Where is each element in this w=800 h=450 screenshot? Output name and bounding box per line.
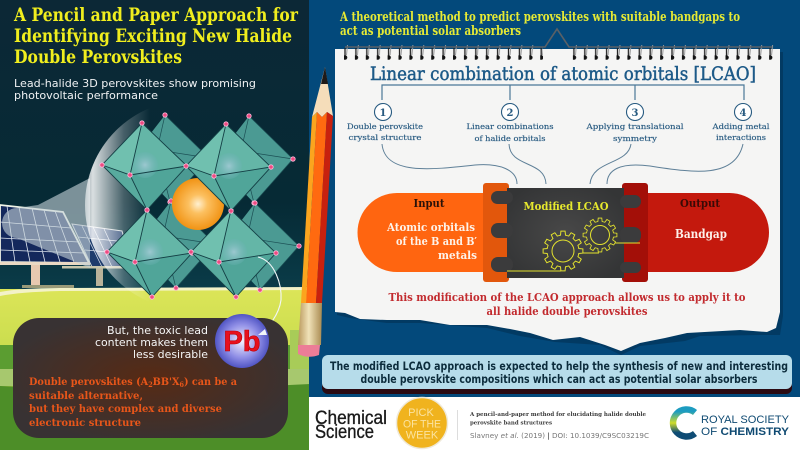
step 1: 1 xyxy=(380,108,386,119)
step 4: Adding metal xyxy=(711,122,770,131)
curved connectors xyxy=(382,144,743,184)
process: input capsule: of the B and B′ xyxy=(396,234,477,248)
step 3: symmetry xyxy=(613,134,658,143)
text: modification note: This modification of the LCAO approach allows us to apply it to xyxy=(388,291,746,304)
panel: right blue background xyxy=(309,0,800,397)
badge: pick of the week: PICK xyxy=(408,407,434,419)
illustration: magnifying dome xyxy=(85,100,295,310)
pencil xyxy=(298,67,333,357)
step 4: 4 xyxy=(740,108,747,119)
top front octahedra xyxy=(100,121,273,213)
badge: pick of the week xyxy=(396,398,448,448)
notepad spiral binding xyxy=(341,29,775,64)
logo: Chemical Science: Science xyxy=(315,422,374,443)
logo: Royal Society of Chemistry: OF CHEMISTRY xyxy=(701,426,790,438)
text: double perovskites alternative: 2 xyxy=(148,380,153,389)
process: input capsule: Atomic orbitals xyxy=(386,220,475,234)
text: double perovskites alternative: suitable alternative, xyxy=(29,390,143,402)
logo: Chemical Science xyxy=(315,408,387,443)
text: double perovskites alternative: 6 xyxy=(179,380,184,389)
text: toxic lead: content makes them xyxy=(95,337,208,349)
process: modified LCAO block xyxy=(483,183,648,282)
illustration: magnified beam xyxy=(2,178,90,268)
subtitle: Lead-halide 3D perovskites show promising xyxy=(14,78,256,90)
text: modification note xyxy=(388,291,746,318)
citation text: Slavney et al. (2019) | DOI: 10.1039/C9SC03219C xyxy=(470,432,649,440)
subtitle: photovoltaic performance xyxy=(14,90,158,102)
process: modified LCAO block: Modified LCAO xyxy=(524,199,608,213)
panel: left background xyxy=(0,0,310,450)
title: Double Perovskites xyxy=(14,47,182,68)
text: double perovskites alternative: Double perovskites (A xyxy=(29,376,158,388)
divider xyxy=(457,410,458,440)
step 1: crystal structure xyxy=(348,133,422,142)
citation text: A pencil-and-paper method for elucidating halide double xyxy=(469,412,646,418)
process: output capsule: Bandgap xyxy=(675,227,727,241)
step 1: Double perovskite xyxy=(347,122,423,131)
citation text xyxy=(469,412,649,440)
subtitle xyxy=(14,78,256,102)
notepad heading: act as potential solar absorbers xyxy=(340,24,521,39)
step 4 xyxy=(711,104,770,142)
badge: pick of the week: WEEK xyxy=(406,430,439,442)
illustration: perovskite crystal xyxy=(100,113,301,299)
orange central sphere xyxy=(172,178,224,230)
process: input capsule: metals xyxy=(438,248,477,262)
process: output capsule xyxy=(635,193,769,272)
pencil body xyxy=(301,112,317,303)
back octahedra xyxy=(130,113,301,292)
panel: lead warning box xyxy=(13,314,288,438)
title xyxy=(13,5,298,68)
step 2: 2 xyxy=(507,108,514,119)
lower front octahedra xyxy=(105,208,278,299)
title: A Pencil and Paper Approach for xyxy=(13,5,298,26)
process: output capsule: Output xyxy=(680,196,721,210)
title: Identifying Exciting New Halide xyxy=(14,26,292,47)
pencil wood tip xyxy=(312,67,333,117)
text: double perovskites alternative: electronic structure xyxy=(29,417,141,429)
text: toxic lead: But, the toxic lead xyxy=(107,325,208,337)
icon: gears xyxy=(507,218,640,271)
tree connector xyxy=(382,85,744,100)
step 3: 3 xyxy=(632,108,639,119)
pencil eraser xyxy=(298,345,320,357)
logo: Royal Society of Chemistry: ROYAL SOCIETY xyxy=(701,414,790,426)
step 1 xyxy=(347,104,423,142)
step 2: Linear combinations xyxy=(466,122,554,131)
badge: pick of the week: OF THE xyxy=(403,418,441,430)
text: double perovskites alternative: but they have complex and diverse xyxy=(29,403,222,415)
icon: Pb atom xyxy=(215,314,269,368)
step 2 xyxy=(466,104,554,143)
panel: notepad xyxy=(335,29,783,355)
text: double perovskites alternative: BB'X xyxy=(153,376,180,388)
text: toxic lead xyxy=(95,325,208,361)
ground: grass field xyxy=(0,287,310,450)
text: double perovskites alternative: ) can be a xyxy=(184,376,237,388)
text: modification note: all halide double perovskites xyxy=(486,305,648,318)
process: input capsule xyxy=(358,193,497,272)
callout: conclusion xyxy=(322,355,792,394)
logo: Royal Society of Chemistry xyxy=(673,410,790,438)
LCAO heading: Linear combination of atomic orbitals [LCAO] xyxy=(370,63,756,85)
connector tabs xyxy=(491,191,641,273)
step 4: interactions xyxy=(716,133,766,142)
notepad heading xyxy=(339,10,740,39)
step 3 xyxy=(585,104,684,143)
text: double perovskites alternative xyxy=(29,376,237,429)
arrow: lead to Pb atom xyxy=(258,257,281,334)
process: input capsule: Input xyxy=(414,196,445,210)
logo: Chemical Science: Chemical xyxy=(315,408,387,429)
icon: Pb atom: Pb xyxy=(223,326,261,358)
citation text: perovskite band structures xyxy=(470,420,552,426)
step 2: of halide orbitals xyxy=(474,134,546,143)
footer background xyxy=(309,397,800,450)
step 3: Applying translational xyxy=(585,122,684,131)
text: toxic lead: less desirable xyxy=(133,349,208,361)
illustration: solar panels xyxy=(0,205,132,288)
pencil ferrule xyxy=(298,303,322,345)
